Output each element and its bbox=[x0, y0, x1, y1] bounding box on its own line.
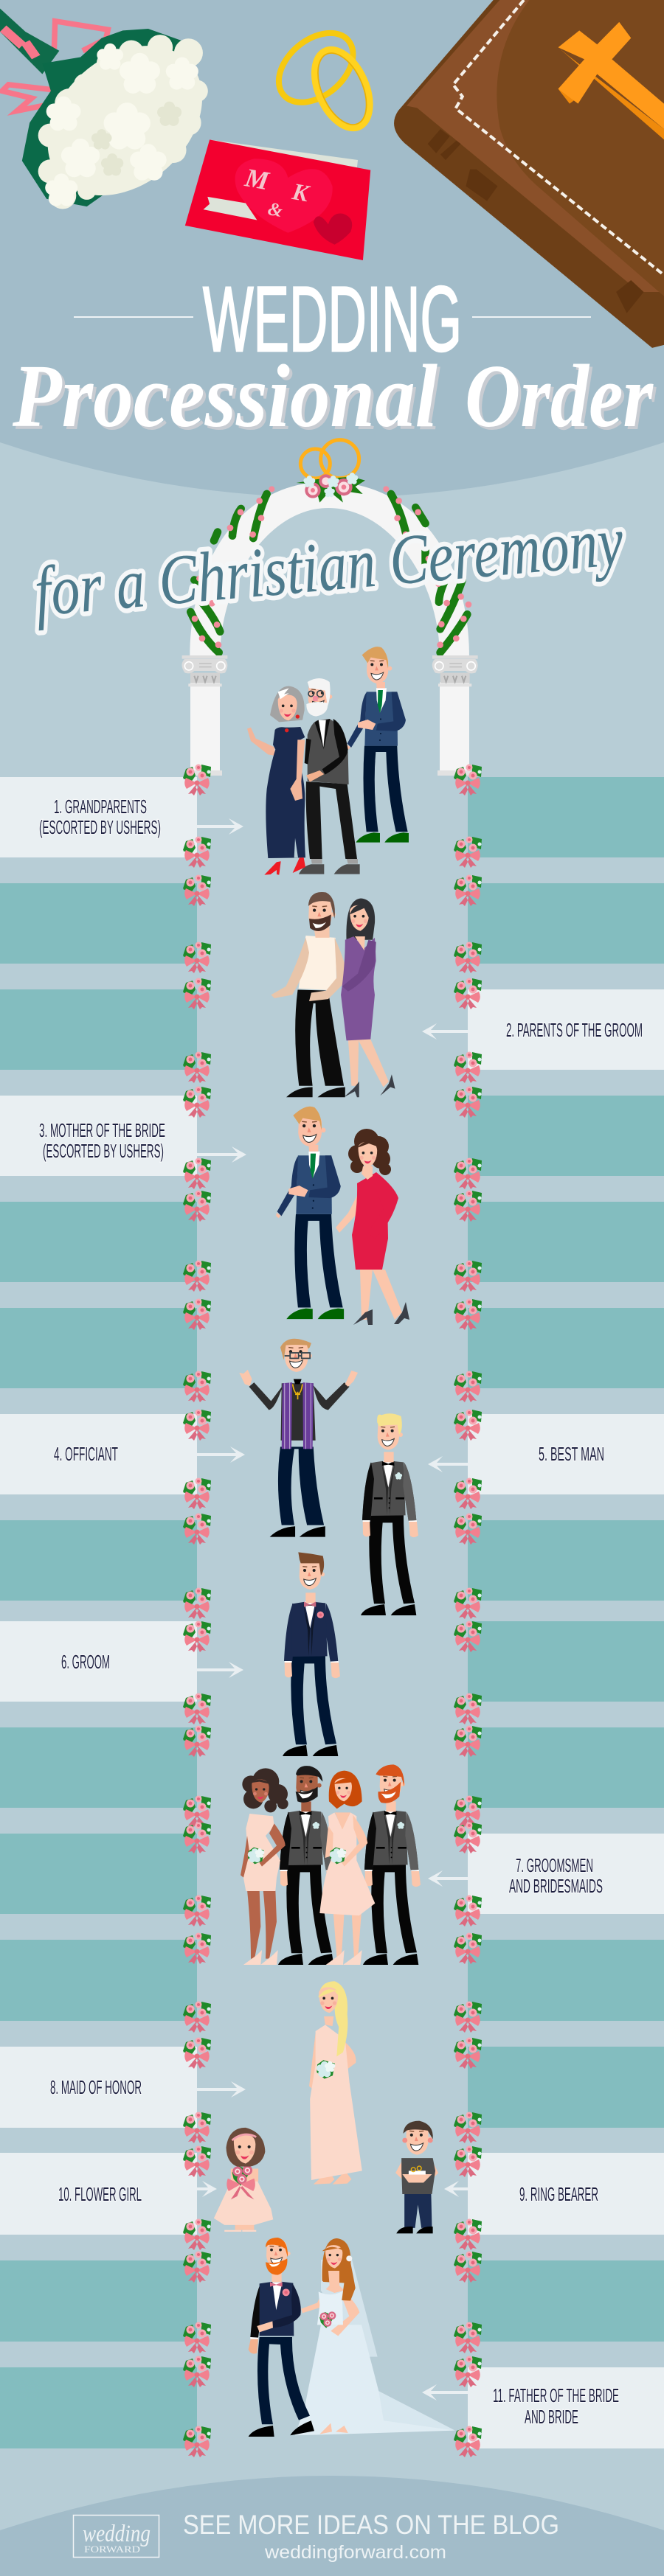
title: WEDDING with side rules: WEDDING bbox=[203, 268, 462, 371]
label 11 bbox=[493, 2384, 619, 2428]
figure: flower girl bbox=[214, 2128, 273, 2232]
icon: bouquet bbox=[0, 8, 232, 226]
label 3 bbox=[39, 1119, 165, 1162]
label 4: 4. OFFICIANT bbox=[54, 1443, 118, 1465]
figure: best man bbox=[361, 1413, 418, 1615]
label 7 bbox=[509, 1854, 603, 1897]
label 10: 10. FLOWER GIRL bbox=[58, 2183, 142, 2205]
aisle side bands bbox=[0, 777, 664, 2448]
label 1: (ESCORTED BY USHERS) bbox=[39, 816, 161, 838]
arrows bbox=[197, 818, 468, 2401]
figure: maid of honor bbox=[309, 1981, 362, 2185]
figure: officiant bbox=[239, 1339, 358, 1537]
arch with rings, columns and vines bbox=[181, 440, 478, 776]
label 1 bbox=[39, 796, 161, 838]
label 11: AND BRIDE bbox=[525, 2406, 578, 2428]
labels bbox=[39, 796, 643, 2428]
label 3: (ESCORTED BY USHERS) bbox=[43, 1140, 164, 1162]
bottom curved footer panel bbox=[0, 2476, 664, 2576]
grandfather bbox=[299, 678, 360, 874]
father of the groom bbox=[271, 892, 347, 1097]
footer call to action: SEE MORE IDEAS ON THE BLOG bbox=[183, 2510, 559, 2540]
father of the bride bbox=[249, 2238, 314, 2437]
column capital left bbox=[181, 655, 227, 686]
arch flower cluster bbox=[297, 473, 365, 503]
footer url: weddingforward.com bbox=[264, 2542, 446, 2563]
floral bows column left bbox=[183, 764, 211, 2457]
grandmother bbox=[247, 686, 305, 875]
icon: invitation card: K bbox=[290, 178, 313, 207]
figure group: grandparents and usher bbox=[247, 647, 409, 875]
icon: bible bbox=[394, 0, 664, 348]
mother of the groom bbox=[341, 899, 395, 1097]
icon: invitation card: M bbox=[242, 162, 272, 195]
icon: invitation card bbox=[185, 139, 370, 260]
label 5: 5. BEST MAN bbox=[539, 1443, 604, 1465]
footer logo: wedding bbox=[83, 2521, 151, 2547]
label 3: 3. MOTHER OF THE BRIDE bbox=[39, 1119, 165, 1141]
label 6: 6. GROOM bbox=[61, 1651, 110, 1673]
footer logo bbox=[74, 2516, 159, 2557]
bride bbox=[295, 2238, 455, 2435]
column capital right bbox=[432, 655, 478, 686]
figure group: groomsmen and bridesmaids bbox=[241, 1764, 421, 1965]
top curved darker panel bbox=[0, 0, 664, 498]
icon: wedding rings bbox=[266, 19, 381, 136]
label 1: 1. GRANDPARENTS bbox=[54, 796, 147, 818]
wedding rings on arch bbox=[300, 440, 359, 478]
figure: ring bearer bbox=[395, 2121, 438, 2233]
floral bows column right bbox=[454, 764, 482, 2457]
title: Processional Order: Processional bbox=[15, 349, 440, 449]
columns bbox=[188, 682, 471, 776]
figure group: parents of the groom bbox=[271, 892, 395, 1097]
figure group: father of the bride and bride bbox=[249, 2238, 455, 2437]
footer logo: FORWARD bbox=[84, 2544, 140, 2555]
figure: usher escort for mother of the bride bbox=[276, 1107, 344, 1319]
bridesmaid left bbox=[241, 1768, 288, 1965]
figure: groom bbox=[283, 1552, 340, 1756]
groomsman right bbox=[363, 1764, 421, 1965]
label 8: 8. MAID OF HONOR bbox=[50, 2076, 142, 2098]
usher bbox=[346, 647, 409, 843]
title: Processional Order: Processional bbox=[12, 347, 438, 446]
icon: invitation card: & bbox=[266, 198, 285, 221]
label 7: 7. GROOMSMEN bbox=[516, 1854, 593, 1876]
bridesmaid right bbox=[319, 1771, 375, 1965]
figure: mother of the bride bbox=[336, 1129, 409, 1325]
groomsman left bbox=[278, 1766, 336, 1965]
